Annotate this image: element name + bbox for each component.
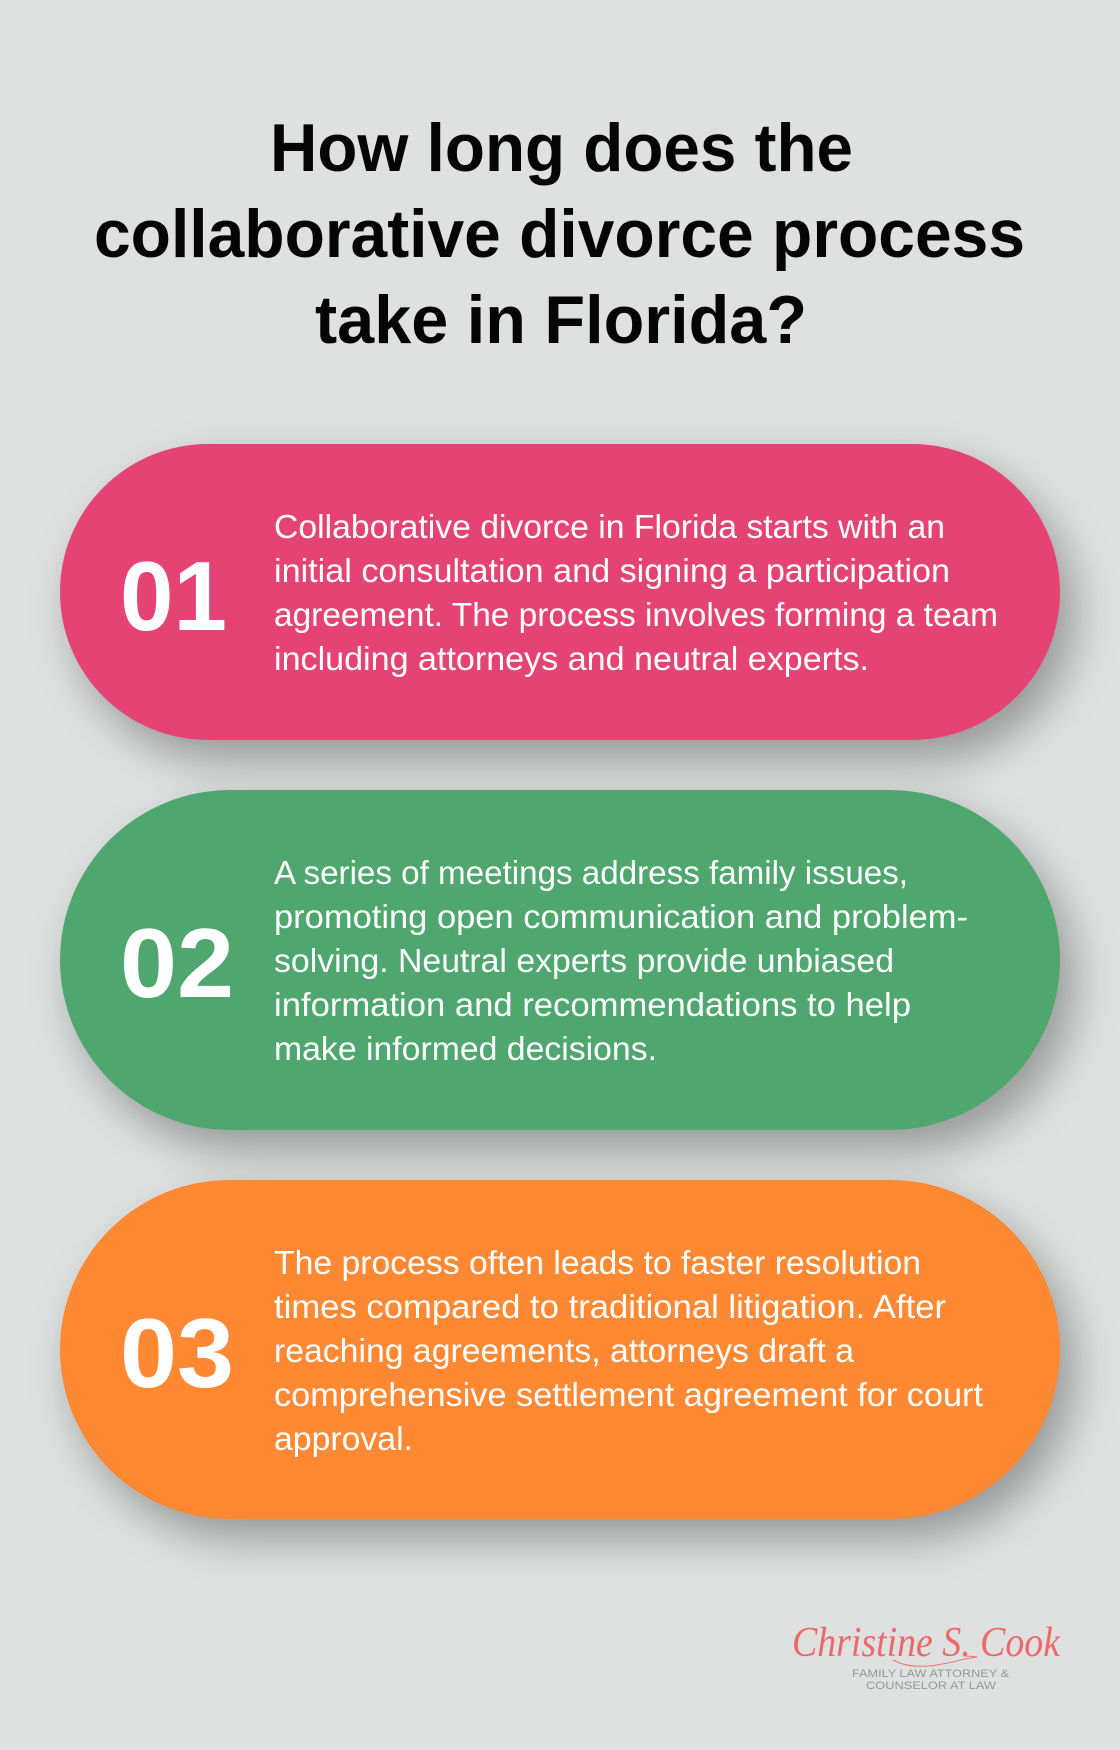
step 02 text: solving. Neutral experts provide unbiased — [274, 942, 894, 979]
logo: Christine S. Cook: Christine S. Cook — [792, 1620, 1061, 1666]
title — [94, 110, 1025, 358]
panel: step 01 — [60, 444, 1060, 740]
step 02 text: promoting open communication and problem- — [274, 898, 968, 935]
step number 03: 03 — [120, 1298, 234, 1408]
title: collaborative divorce process — [94, 196, 1025, 272]
step 03 text: approval. — [274, 1420, 413, 1457]
step 02 text: information and recommendations to help — [274, 986, 911, 1023]
step 01 text: including attorneys and neutral experts. — [274, 640, 869, 677]
logo: Christine S. Cook — [792, 1620, 1061, 1692]
panel: step 02 — [60, 790, 1060, 1130]
step 01 text — [274, 508, 998, 677]
step 03 text: reaching agreements, attorneys draft a — [274, 1332, 855, 1369]
step number 01: 01 — [120, 541, 227, 651]
step 01 text: Collaborative divorce in Florida starts with an — [274, 508, 945, 545]
logo: Christine S. Cook: FAMILY LAW ATTORNEY & — [852, 1668, 1010, 1680]
step number 02: 02 — [120, 908, 234, 1018]
step 01 text: initial consultation and signing a participation — [274, 552, 950, 589]
panel: step 03 — [60, 1180, 1060, 1519]
step 02 text: make informed decisions. — [274, 1030, 657, 1067]
step 02 text: A series of meetings address family issues, — [274, 854, 908, 891]
title: How long does the — [270, 110, 853, 186]
step 03 text — [274, 1244, 983, 1457]
step 03 text: The process often leads to faster resolution — [274, 1244, 921, 1281]
step 01 text: agreement. The process involves forming a team — [274, 596, 998, 633]
step 02 text — [274, 854, 968, 1067]
title: take in Florida? — [315, 282, 807, 358]
step 03 text: comprehensive settlement agreement for court — [274, 1376, 983, 1413]
logo: Christine S. Cook: COUNSELOR AT LAW — [866, 1680, 997, 1692]
step 03 text: times compared to traditional litigation. After — [274, 1288, 946, 1325]
